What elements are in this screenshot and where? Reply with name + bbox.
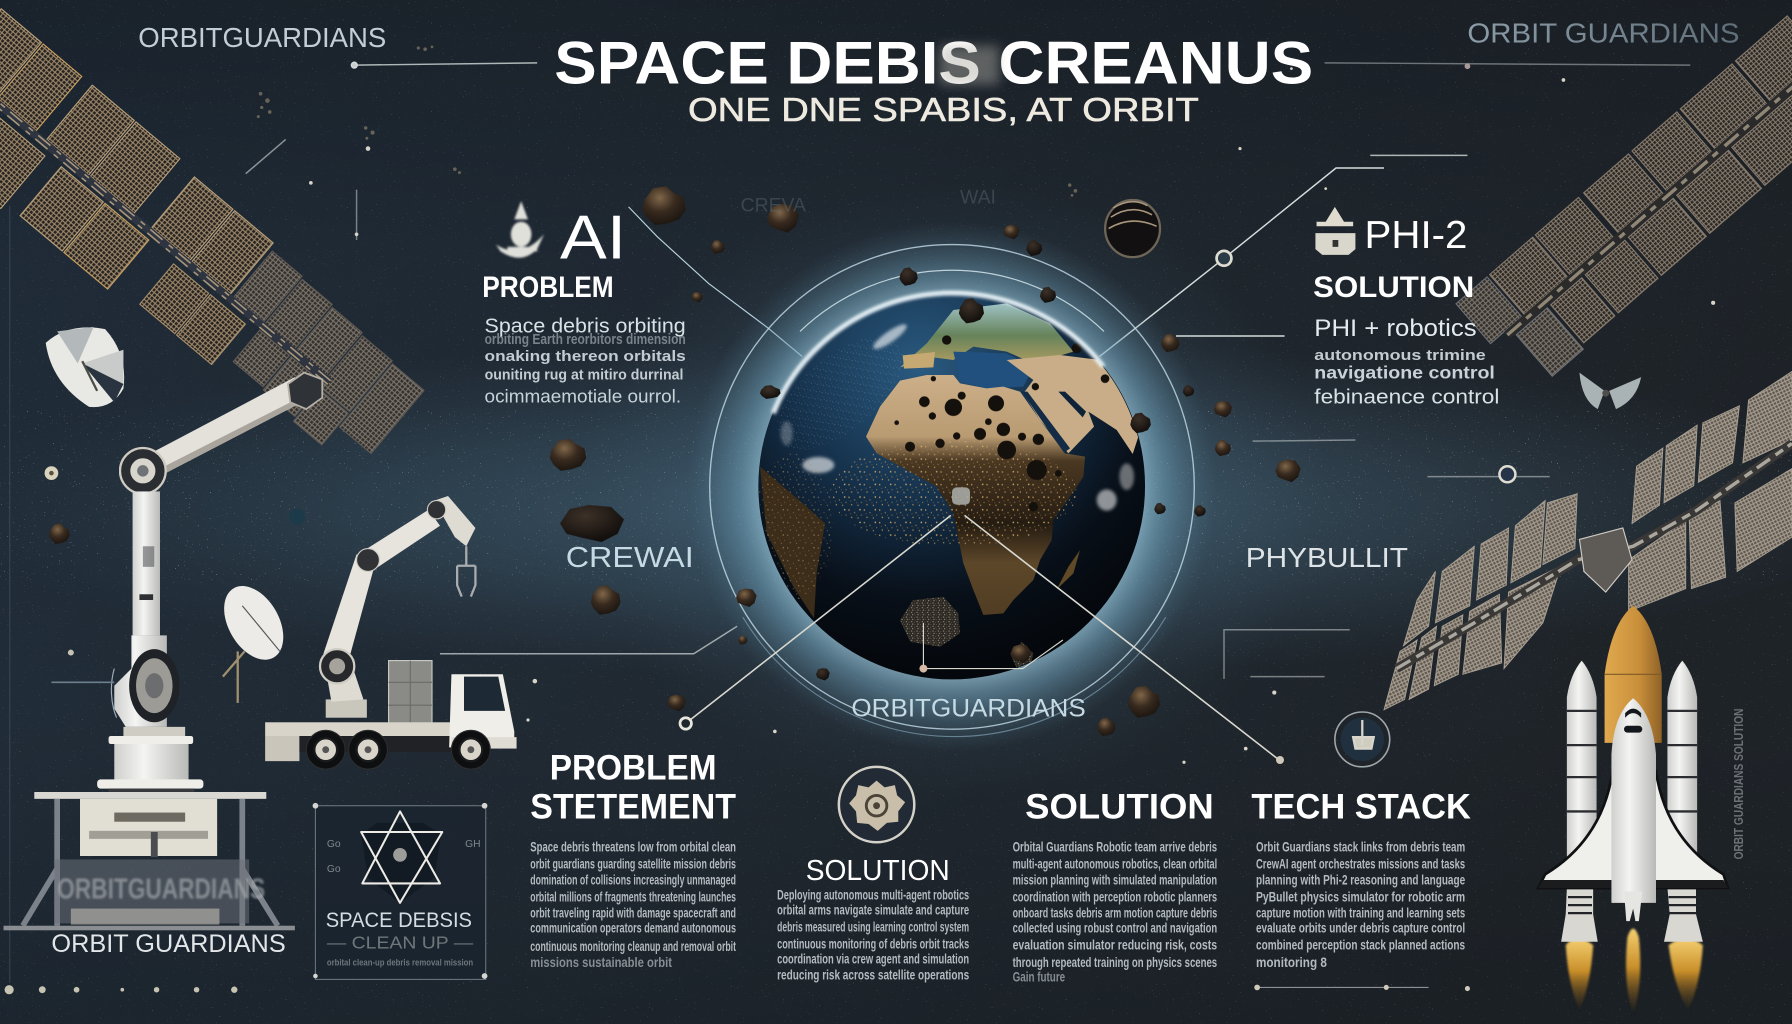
- body text: orbital arms navigate simulate and capture: [777, 902, 969, 917]
- body text: reducing risk across satellite operations: [777, 967, 969, 982]
- heading: PHI-2: PHI-2: [1365, 214, 1467, 257]
- problem text: orbiting Earth reorbitors dimension: [485, 332, 686, 348]
- body text: multi-agent autonomous robotics, clean orbital: [1013, 857, 1217, 872]
- body text: Deploying autonomous multi-agent robotics: [777, 887, 969, 902]
- body text: orbit traveling rapid with damage spacecraft and: [530, 906, 736, 921]
- body text: evaluation simulator reducing risk, costs: [1013, 938, 1217, 953]
- ocean glitter: [776, 338, 903, 450]
- center marker: [952, 487, 970, 505]
- panel: solution right: [1013, 786, 1217, 985]
- body text: planning with Phi-2 reasoning and language: [1256, 873, 1465, 888]
- panel: problem statement: [530, 747, 736, 970]
- truck with robotic arm: [265, 496, 517, 769]
- body text: CrewAI agent orchestrates missions and tasks: [1256, 857, 1465, 872]
- label: Orbit Guardians on ring: ORBITGUARDIANS: [851, 695, 1086, 723]
- body text: [530, 839, 736, 970]
- brand top right: ORBIT GUARDIANS: [1467, 17, 1739, 48]
- earth globe: [753, 293, 1145, 679]
- card fine print: orbital clean-up debris removal mission: [327, 958, 473, 968]
- footer slider: [1254, 985, 1470, 991]
- ghost labels: CREVA: [741, 194, 806, 216]
- satellite dish: small: [212, 576, 295, 703]
- problem text: ocimmaemotiale ourrol.: [485, 385, 681, 406]
- satellite dish: large: [46, 327, 124, 407]
- exhaust flames: [1566, 929, 1703, 1015]
- continent: europe: [900, 303, 1073, 367]
- panel: PHI-2 solution: [1313, 207, 1499, 408]
- problem text: onaking thereon orbitals: [485, 349, 686, 365]
- solution text: febinaence control: [1314, 385, 1499, 408]
- body text: onboard tasks debris arm motion capture debris: [1013, 906, 1217, 921]
- continent: africa: [866, 375, 1085, 615]
- city-light specks: [830, 440, 1077, 547]
- orbiter wings: [1538, 771, 1728, 888]
- card subheading: — CLEAN UP —: [327, 933, 474, 953]
- legs: [23, 799, 278, 926]
- tower caption: ORBIT GUARDIANS: [51, 931, 286, 958]
- solution text: autonomous trimine: [1314, 348, 1486, 364]
- icon: hexagram: [361, 811, 442, 903]
- heading: PROBLEM: [550, 747, 717, 787]
- madagascar: [1057, 550, 1080, 589]
- body text: monitoring 8: [1256, 955, 1327, 970]
- continent: south america: [760, 467, 825, 618]
- heading: solution: SOLUTION: [1313, 271, 1474, 304]
- body text: evaluate orbits under debris capture control: [1256, 921, 1465, 936]
- side glyph marks: [327, 839, 481, 875]
- debris blotches: [894, 335, 1109, 511]
- body text: combined perception stack planned actions: [1256, 938, 1465, 953]
- card heading: SPACE DEBSIS: [326, 907, 472, 932]
- panel: tech stack: [1251, 786, 1471, 991]
- upper arm: [154, 377, 306, 474]
- heading: SOLUTION: [1025, 786, 1214, 826]
- iberia coast: [903, 352, 935, 369]
- body text: domination of collisions increasingly unmanaged: [530, 873, 736, 888]
- body text: communication operators demand autonomous: [530, 921, 736, 936]
- body text: debris measured using learning control system: [777, 919, 969, 934]
- brand top left: ORBITGUARDIANS: [138, 22, 386, 53]
- side glyph marks: Go: [327, 864, 341, 875]
- continent: arabia and asia: [1007, 355, 1138, 454]
- debris field: [49, 186, 1301, 736]
- solution text: PHI + robotics: [1314, 315, 1477, 342]
- red sea: [1022, 392, 1070, 453]
- title: SPACE DEBIS CREANUS: [554, 28, 1313, 96]
- body text: continuous monitoring of debris orbit tracks: [777, 937, 969, 952]
- orbit connector lines: [246, 62, 1690, 679]
- heading: [530, 747, 736, 826]
- external tank: [1605, 606, 1662, 743]
- clouds: [781, 321, 1134, 511]
- problem text: ouniting rug at mitiro durrinal: [485, 367, 683, 383]
- glass plinth: [55, 859, 249, 923]
- heading: SOLUTION: [806, 855, 950, 887]
- heading: AI: AI: [560, 203, 626, 272]
- subtitle: ONE DNE SPABIS, AT ORBIT: [688, 92, 1199, 129]
- large robot arm tower: ORBITGUARDIANS: [57, 873, 265, 905]
- body text: coordination via crew agent and simulation: [777, 951, 969, 966]
- table body: [80, 799, 217, 856]
- bright limb: [773, 293, 1103, 413]
- left booster: [1567, 661, 1597, 888]
- solar array: upper left: [0, 9, 437, 492]
- icon: tech compass circle: [1335, 712, 1390, 767]
- globe connector lines and nodes: [680, 251, 1515, 764]
- vertical side caption: ORBIT GUARDIANS SOLUTION: [1732, 709, 1746, 859]
- right booster: [1667, 661, 1697, 888]
- booster nozzles: [1561, 888, 1598, 942]
- body text: PyBullet physics simulator for robotic arm: [1256, 890, 1465, 905]
- tail fin: [1624, 891, 1642, 921]
- body text: [1013, 839, 1217, 985]
- body text: [777, 887, 969, 982]
- inset boulder on globe: [900, 597, 960, 647]
- body text: orbit guardians guarding satellite mission debris: [530, 857, 736, 872]
- body text: [1256, 839, 1465, 970]
- orbiter fuselage: [1611, 698, 1656, 903]
- solar array: lower right: [1384, 371, 1792, 710]
- small bolts row: [5, 466, 305, 994]
- body text: Gain future: [1013, 970, 1065, 985]
- body text: coordination with perception robotic planners: [1013, 890, 1217, 905]
- body text: through repeated training on physics scenes: [1013, 955, 1217, 970]
- truck arm: [326, 699, 367, 718]
- body text: orbital millions of fragments threatening launches: [530, 890, 736, 905]
- striped dark sphere: [1105, 200, 1160, 257]
- heading: problem: PROBLEM: [482, 271, 614, 304]
- problem text: Space debris orbiting: [485, 315, 686, 338]
- side glyph marks: GH: [465, 839, 481, 850]
- panel: AI problem: [482, 201, 686, 406]
- body text: Orbital Guardians Robotic team arrive debris: [1013, 839, 1217, 854]
- body text: capture motion with training and learning sets: [1256, 906, 1465, 921]
- ghost labels: [741, 186, 996, 216]
- label: CrewAI: CREWAI: [566, 542, 694, 574]
- body text: mission planning with simulated manipulation: [1013, 873, 1217, 888]
- solution text: navigatione control: [1314, 362, 1495, 382]
- shoulder body: [114, 635, 167, 727]
- body text: missions sustainable orbit: [530, 955, 672, 970]
- body text: Space debris threatens low from orbital clean: [530, 839, 736, 854]
- ghost labels: WAI: [960, 186, 996, 208]
- large robot arm tower: [3, 373, 322, 930]
- persian gulf: [1058, 392, 1086, 417]
- body text: Orbit Guardians stack links from debris team: [1256, 839, 1465, 854]
- solar array: upper right: [1456, 16, 1792, 393]
- body text: collected using robust control and navigation: [1013, 921, 1217, 936]
- heading: TECH STACK: [1251, 786, 1471, 826]
- icon: spiral gear: [839, 767, 914, 842]
- icon: AI emblem: [496, 201, 544, 258]
- body text: continuous monitoring cleanup and removal orbit: [530, 939, 736, 954]
- side glyph marks: Go: [327, 839, 341, 850]
- panel: space debris card: [313, 803, 487, 979]
- elbow joint: [120, 448, 166, 494]
- space shuttle: [1538, 606, 1728, 1015]
- column: [133, 491, 160, 635]
- butterfly-shaped probe: [1579, 373, 1641, 409]
- problem text: [485, 315, 686, 406]
- solution text: [1314, 315, 1499, 408]
- earth halo and orbit rings: [687, 222, 1217, 752]
- icon: PHI bucket: [1315, 207, 1355, 255]
- wrist joint: [288, 373, 322, 409]
- panel: solution center: [777, 767, 969, 982]
- mediterranean: [953, 352, 1033, 388]
- label: PhyBullet: PHYBULLIT: [1246, 542, 1408, 573]
- pedestal: [123, 727, 185, 743]
- heading: STETEMENT: [530, 786, 736, 826]
